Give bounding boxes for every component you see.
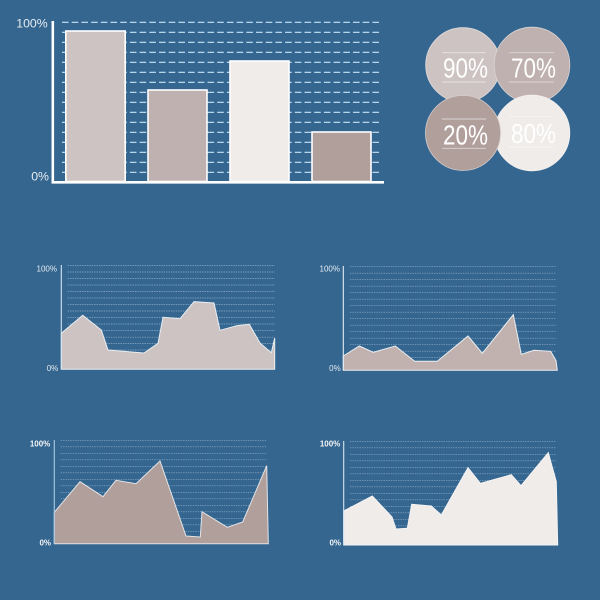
label 0%: 0% bbox=[329, 539, 341, 548]
bar chart bbox=[16, 17, 384, 183]
area chart 2 bbox=[320, 265, 557, 373]
label 100%: 100% bbox=[30, 440, 50, 449]
axis bbox=[342, 266, 344, 370]
circle 20% bbox=[426, 96, 500, 170]
circle 70%: 70% bbox=[511, 53, 556, 84]
axis bbox=[343, 441, 345, 545]
area chart 1 bbox=[37, 265, 275, 373]
bar 4 bbox=[312, 132, 371, 182]
bar 1 bbox=[66, 31, 125, 182]
circle 90%: 90% bbox=[443, 53, 488, 84]
label 0%: 0% bbox=[47, 364, 58, 373]
label 100%: 100% bbox=[37, 265, 57, 274]
circle 20%: 20% bbox=[443, 119, 488, 150]
label 0%: 0% bbox=[329, 364, 341, 373]
area bbox=[343, 315, 557, 370]
area chart 3 bbox=[30, 440, 268, 548]
axis label 100%: 100% bbox=[16, 17, 48, 31]
bar 3 bbox=[230, 61, 289, 182]
area bbox=[54, 461, 268, 544]
area bbox=[61, 302, 275, 369]
area bbox=[344, 453, 558, 545]
label 100%: 100% bbox=[320, 265, 340, 274]
bar chart axes bbox=[53, 21, 384, 182]
axis label 0%: 0% bbox=[31, 169, 49, 183]
label 0%: 0% bbox=[39, 539, 51, 548]
axis bbox=[53, 440, 55, 544]
percentage circles bbox=[426, 27, 570, 171]
circle 90% bbox=[426, 28, 500, 102]
bar 2 bbox=[148, 90, 207, 182]
circle 80%: 80% bbox=[511, 118, 556, 149]
circle 70% bbox=[494, 27, 570, 103]
axis bbox=[60, 265, 62, 370]
circle 80% bbox=[494, 95, 570, 171]
label 100%: 100% bbox=[320, 440, 340, 449]
area chart 4 bbox=[320, 440, 558, 548]
